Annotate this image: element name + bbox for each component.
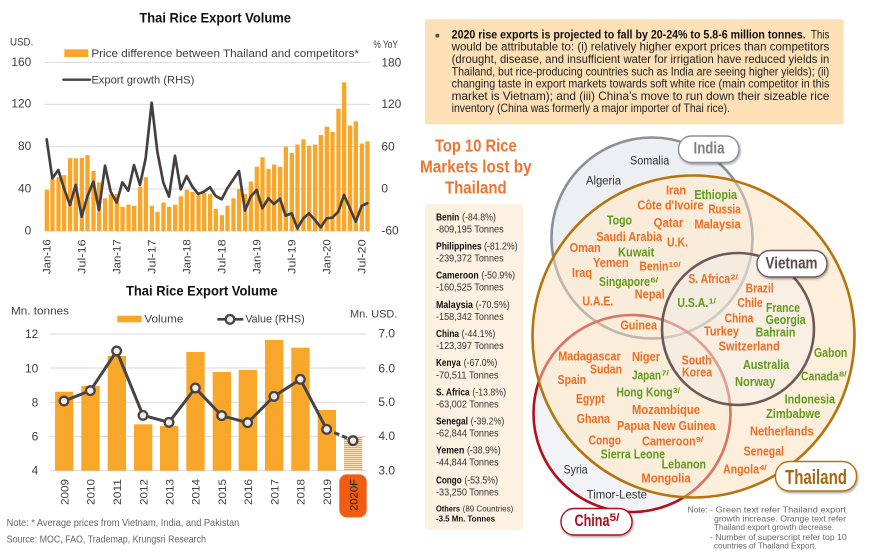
labels: lower venn countries: Zimbabwe [766,407,820,421]
line: export growth [47,103,367,228]
list of markets: -63,002 Tonnes [436,399,499,410]
left axis labels: 4 [32,463,39,477]
callout text: 2020 rise exports is projected to fall by 20-24% to 5.8-6 million tonnes. [452,28,806,41]
list of markets: Congo [436,475,462,486]
list of markets [436,213,518,524]
x axis month labels: Jul-16 [76,239,88,274]
labels: upper venn countries: Brazil [746,282,774,296]
circle: Vietnam [662,253,814,405]
labels: lower venn countries: Netherlands [750,425,814,439]
panel: bottom chart volume and value [7,284,397,545]
list of markets: Philippines [436,242,482,253]
bar chart: volume [55,340,336,471]
list of markets: -239,372 Tonnes [436,254,504,265]
labels: upper venn countries: Iraq [572,266,592,280]
list of markets: (-70.5%) [476,300,510,311]
labels: upper venn countries: Qatar [654,216,683,230]
labels: upper venn countries: Oman [570,241,601,255]
left axis labels: 6 [32,430,39,444]
x axis year labels: 2010 [86,479,98,505]
panel: summary callout [425,19,844,124]
left axis labels [25,327,39,477]
labels: lower venn countries: Sudan [590,362,622,376]
list of markets: Yemen [436,445,464,456]
labels: lower venn countries: Cameroon [642,435,696,449]
labels: lower venn countries: 3/ [673,386,680,395]
labels: upper venn countries: Turkey [704,324,739,338]
callout text: This [811,28,829,41]
legend: Volume [144,313,183,325]
callout text: Thailand, but rice-producing countries such as India are seeing higher yields); (ii) [452,65,829,78]
venn note: Note: [688,505,708,515]
list of markets: S. Africa [436,387,470,398]
list of markets: (89 Countries) [463,503,514,513]
labels: upper venn countries: Chile [737,296,763,310]
list of markets: Kenya [436,358,461,369]
callout text: inventory (China was formerly a major importer of Thai rice). [452,102,730,115]
labels: lower venn countries: Angola [723,463,760,477]
label pill: Vietnam [757,250,827,277]
left axis labels: 120 [11,97,32,111]
x axis year labels: 2020F [348,479,360,511]
x axis month labels: Jan-18 [181,239,193,274]
list of markets: (-44.1%) [462,329,495,340]
list of markets: -123,397 Tonnes [436,341,504,352]
label pill: Thailand [776,462,856,491]
labels: lower venn countries: Canada [801,369,839,383]
labels: upper venn countries: 1/ [709,296,716,305]
note: Note: * Average prices from Vietnam, India, and Pakistan [7,518,239,529]
left axis unit: USD. [10,37,33,49]
list of markets: -33,250 Tonnes [436,487,499,498]
label pill: China: 5/ [610,512,620,524]
list of markets: Malaysia [436,300,474,311]
list of markets: (-81.2%) [484,242,518,253]
circle: India [552,138,752,338]
list of markets: Senegal [436,417,468,428]
label pill: India: India [694,138,725,158]
labels: lower venn countries: Korea [682,365,713,379]
labels: upper venn countries: Guinea [620,318,658,332]
panel: top chart export volume price difference [10,11,402,274]
labels: upper venn countries: Malaysia [694,217,741,231]
labels: lower venn countries: Gabon [814,346,847,360]
labels: upper venn countries: 6/ [650,275,658,284]
labels: upper venn countries: Côte d'Ivoire [637,198,704,212]
list of markets: -44,844 Tonnes [436,458,499,469]
label pill: Thailand: Thailand [785,467,847,489]
labels: upper venn countries: Ethiopia [694,188,738,202]
labels: lower venn countries: Norway [735,375,775,389]
labels: lower venn countries: Timor-Leste [587,487,647,501]
x axis year labels: 2014 [191,479,203,505]
venn note: growth increase. Orange text refer [714,513,846,523]
right axis labels: 3.0 [378,463,395,477]
left axis labels [11,55,32,237]
labels: lower venn countries: Australia [743,358,790,372]
list of markets: Benin [436,213,459,224]
labels: lower venn countries: Ghana [577,412,611,426]
venn note: Thailand export growth decrease. [714,522,834,532]
heading: Top 10 Rice [435,136,517,156]
list of markets: (-50.9%) [481,271,515,282]
right axis labels: 7.0 [378,327,395,341]
label pill: Vietnam: Vietnam [766,254,818,272]
labels: upper venn countries: Somalia [630,153,670,167]
venn note: - Number of superscript refer top 10 [710,532,847,542]
left axis labels: 160 [11,55,32,69]
list of markets: (-53.5%) [464,475,498,486]
list of markets: (-13.8%) [472,387,506,398]
right axis labels [378,327,395,477]
panel: top 10 markets lost [420,136,532,530]
list of markets: -158,342 Tonnes [436,312,504,323]
x axis month labels: Jul-17 [146,239,158,274]
labels: upper venn countries: Togo [607,213,632,227]
source: Source: MOC, FAO, Trademap, Krungsri Research [7,534,206,545]
labels: lower venn countries: South [682,353,712,367]
legend: Value (RHS) [245,313,305,325]
legend [63,48,360,87]
label pill: China [561,508,632,535]
callout text: market is Vietnam); and (iii) China’s move to run down their sizeable rice [452,90,829,103]
left axis unit: Mn. tonnes [11,305,70,317]
label pill: India [678,136,739,162]
list of markets: -809,195 Tonnes [436,225,504,236]
venn note: - Green text refer Thailand export [710,505,847,515]
left axis labels: 8 [32,395,39,409]
labels: lower venn countries: 8/ [839,370,847,379]
labels: upper venn countries: U.A.E. [582,294,613,308]
right axis labels: 6.0 [378,361,395,375]
x axis year labels: 2012 [138,479,150,505]
circle: Thailand [531,174,856,499]
x axis year labels: 2011 [112,479,124,505]
labels: upper venn countries [570,153,806,339]
x axis month labels: Jul-20 [356,239,368,274]
x axis month labels: Jul-18 [216,239,228,274]
labels: lower venn countries: Japan [632,368,661,382]
labels: upper venn countries: Iran [666,184,686,198]
heading [420,136,532,197]
callout text: would be attributable to: (i) relatively higher export prices than competitors [451,41,829,54]
left axis labels: 80 [18,139,32,153]
labels: upper venn countries: Saudi Arabia [596,230,663,244]
list of markets: Cameroon [436,271,479,282]
labels: upper venn countries: S. Africa [688,272,731,286]
callout background [425,19,844,124]
legend: Export growth (RHS) [91,75,194,87]
labels: lower venn countries: Switzerland [719,340,780,354]
callout text: changing taste in export markets towards soft white rice (main competitor in this [452,77,829,90]
labels: lower venn countries: Madagascar [558,349,621,363]
line: export value [60,347,357,445]
labels: upper venn countries: U.K. [667,235,688,249]
list of markets: (-67.0%) [464,358,497,369]
left axis labels: 0 [25,223,32,237]
labels: lower venn countries: Lebanon [662,458,706,472]
left axis labels: 10 [25,361,39,375]
right axis labels: 60 [381,139,395,153]
grid lines [44,62,370,231]
labels: lower venn countries: 9/ [696,435,703,444]
x axis year labels: 2016 [243,479,255,505]
right axis labels: 120 [381,97,402,111]
list of markets: (-38.9%) [467,445,501,456]
x axis month labels [41,239,368,274]
labels: upper venn countries: 2/ [730,272,738,281]
list of markets: Others [436,503,460,513]
labels: upper venn countries: Bahrain [756,325,795,339]
chart title: Thai Rice Export Volume [139,11,291,26]
list of markets: -70,511 Tonnes [436,370,499,381]
labels: upper venn countries: China [725,312,754,326]
x axis year labels: 2018 [296,479,308,505]
labels: upper venn countries: U.S.A. [677,296,708,310]
legend [117,313,305,325]
grid lines [50,334,366,471]
labels: lower venn countries: Senegal [744,445,784,459]
circle: China [534,315,730,512]
bullet [435,34,439,38]
labels: upper venn countries: Georgia [766,313,806,327]
heading: Markets lost by [420,156,532,176]
right axis unit: Mn. USD. [350,309,397,321]
callout text: (drought, disease, and insufficient water for irrigation have reduced yields in [452,53,829,66]
list of markets: China [436,329,460,340]
labels: lower venn countries: Egypt [576,392,605,406]
x axis year labels: 2015 [217,479,229,505]
left axis labels: 40 [18,181,32,195]
forecast highlight pill [339,474,367,517]
labels: lower venn countries: Papua New Guinea [617,419,716,433]
x axis month labels: Jul-19 [286,239,298,274]
list of markets: -160,525 Tonnes [436,283,504,294]
x axis year labels: 2017 [269,479,281,505]
labels: upper venn countries: Russia [708,202,741,216]
list of markets: -62,844 Tonnes [436,429,499,440]
heading: Thailand [445,177,507,197]
labels: lower venn countries: Syria [564,463,588,477]
left axis labels: 12 [25,327,39,341]
labels: lower venn countries: Sierra Leone [601,447,665,461]
callout text [451,28,829,115]
bar chart: price difference [45,82,370,231]
x axis year labels: 2013 [164,479,176,505]
labels: lower venn countries: 4/ [759,463,767,472]
labels: upper venn countries: Algeria [586,173,621,187]
right axis labels: 5.0 [378,395,395,409]
right axis labels [381,55,402,238]
legend: Price difference between Thailand and competitors* [91,48,360,60]
list of markets: (-39.2%) [471,417,504,428]
right axis labels: 180 [381,55,402,69]
x axis month labels: Jan-20 [321,239,333,274]
x axis year labels: 2019 [322,479,334,505]
labels: upper venn countries: France [766,301,800,315]
labels: upper venn countries: Singapore [599,275,650,289]
x axis year labels: 2009 [59,479,71,505]
x axis month labels: Jan-16 [41,239,53,274]
labels: lower venn countries [558,340,847,501]
x axis year labels [59,479,360,511]
venn note [688,505,847,550]
x axis month labels: Jan-17 [111,239,123,274]
forecast bar: 2020F hatched [344,437,362,471]
label pill: China: China [574,511,610,530]
labels: lower venn countries: Mongolia [641,472,692,486]
right axis labels: 4.0 [378,429,395,443]
list background [425,204,524,530]
x axis month labels: Jan-19 [251,239,263,274]
labels: upper venn countries: 10/ [668,260,681,269]
labels: lower venn countries: Hong Kong [616,386,673,400]
labels: upper venn countries: Yemen [593,256,629,270]
labels: upper venn countries: Nepal [635,287,665,301]
chart title: Thai Rice Export Volume [126,284,278,299]
venn note: countries of Thailand Export. [714,540,817,550]
venn diagram [532,136,856,535]
list of markets: (-84.8%) [462,213,496,224]
labels: upper venn countries: Kuwait [618,245,655,259]
labels: lower venn countries: Indonesia [785,393,836,407]
labels: lower venn countries: Mozambique [632,403,700,417]
labels: lower venn countries: Niger [632,350,660,364]
labels: lower venn countries: Congo [589,433,621,447]
right axis unit: % YoY [373,39,399,51]
right axis labels: -60 [381,224,399,238]
labels: lower venn countries: 7/ [661,369,669,378]
right axis labels: 0 [381,181,388,195]
list of markets: -3.5 Mn. Tonnes [436,514,495,524]
labels: upper venn countries: Benin [639,260,668,274]
labels: lower venn countries: Spain [558,373,586,387]
